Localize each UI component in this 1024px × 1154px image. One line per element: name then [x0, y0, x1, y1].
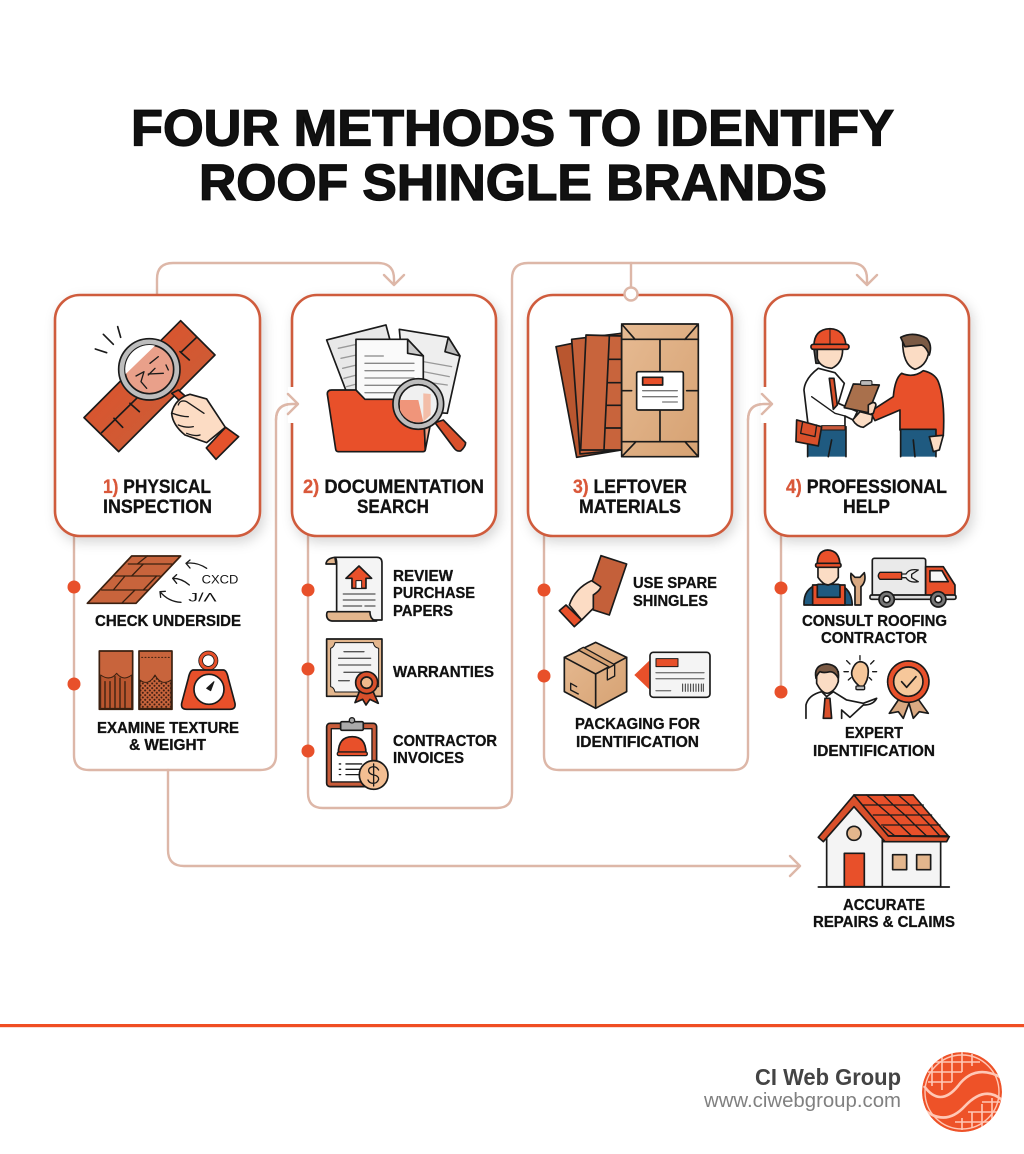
label: consult roofing contractor: CONSULT ROOFING — [802, 613, 947, 630]
title: ROOF SHINGLE BRANDS — [199, 154, 827, 211]
bullet dots 3 — [538, 584, 550, 682]
arrow: sublist 2 to card 4 — [308, 263, 877, 808]
title — [131, 100, 894, 211]
label: contractor invoices: CONTRACTOR — [393, 733, 497, 750]
icon: shingles and package — [556, 324, 698, 457]
label: consult roofing contractor: CONTRACTOR — [821, 630, 927, 647]
label: examine texture and weight — [97, 720, 239, 754]
arrow: card 1 to card 2 — [157, 263, 404, 295]
logo: circular brand mark — [922, 1052, 1002, 1132]
heading 1 — [103, 477, 212, 518]
gap in card 2 border — [288, 387, 296, 423]
sublist: physical inspection steps — [68, 556, 241, 754]
card frame 2 — [292, 295, 496, 536]
icon: contractor invoice clipboard — [327, 718, 388, 789]
label: use spare shingles: SHINGLES — [633, 593, 708, 610]
label: contractor invoices — [393, 733, 497, 767]
icon: roofing contractor and truck — [804, 550, 956, 607]
heading 2 — [303, 477, 484, 518]
icon: shingle underside: CXCD — [202, 573, 238, 587]
footer rule — [0, 1024, 1024, 1027]
icon: magnifier over shingle — [84, 321, 239, 459]
label: accurate repairs and claims: REPAIRS & CLAIMS — [813, 914, 955, 931]
branch node — [624, 288, 638, 300]
label: contractor invoices: INVOICES — [393, 750, 464, 767]
label: use spare shingles — [633, 575, 717, 610]
label: examine texture and weight: & WEIGHT — [129, 737, 206, 754]
label: use spare shingles: USE SPARE — [633, 575, 717, 592]
panel: physical inspection — [55, 295, 260, 536]
outcome: accurate repairs and claims — [813, 795, 955, 931]
sublist: leftover materials steps — [538, 556, 717, 751]
panel: leftover materials — [528, 288, 732, 536]
icon: house with red roof — [818, 795, 949, 887]
label: expert identification: IDENTIFICATION — [813, 743, 935, 760]
icon: warranty certificate — [327, 639, 382, 705]
icon: purchase paper scroll — [326, 557, 382, 621]
bullet dots 1 — [68, 580, 80, 690]
sublist: documentation steps — [302, 557, 497, 789]
label: accurate repairs and claims — [813, 897, 955, 931]
icon: package and shipping label — [564, 642, 710, 708]
icon: texture samples and weight — [99, 651, 235, 709]
label: expert identification — [813, 725, 935, 760]
heading 2: SEARCH — [357, 497, 429, 518]
label: packaging for identification: IDENTIFICATION — [576, 734, 699, 751]
label: review purchase papers: PURCHASE — [393, 585, 475, 602]
footer brand text: www.ciwebgroup.com — [703, 1090, 901, 1112]
card frame 3 — [528, 295, 732, 536]
card frame 1 — [55, 295, 260, 536]
heading 2: 2) DOCUMENTATION — [303, 477, 484, 498]
label: packaging for identification: PACKAGING FOR — [575, 716, 700, 733]
bullet dots 2 — [302, 584, 314, 758]
arrow: to accurate repairs — [168, 770, 800, 876]
gap in card 4 border — [761, 387, 769, 423]
label: review purchase papers — [393, 568, 475, 620]
connector arrows — [74, 263, 877, 876]
icon: expert with bulb and badge — [806, 656, 929, 718]
icon: folder and documents — [327, 325, 466, 452]
arrow: sublist 3 into card 4 — [544, 394, 772, 770]
heading 4: HELP — [843, 497, 890, 518]
arrow: sublist 1 into card 2 — [74, 394, 298, 770]
line: sublist 4 — [780, 536, 782, 692]
heading 3: MATERIALS — [579, 497, 681, 518]
heading 4: 4) PROFESSIONAL — [786, 477, 947, 498]
branch to card 3 — [630, 263, 632, 287]
card frame 4 — [765, 295, 969, 536]
icon: shingle underside: J/Λ — [188, 590, 218, 604]
arrow head over card 2 — [276, 394, 298, 420]
heading 3 — [573, 477, 687, 518]
heading 1: 1) PHYSICAL — [103, 477, 211, 498]
label: expert identification: EXPERT — [845, 725, 903, 742]
sublist: professional help steps — [774, 550, 956, 760]
arrow head over card 4 — [748, 394, 772, 420]
label: consult roofing contractor — [802, 613, 947, 647]
panel: professional help — [748, 295, 969, 536]
label: packaging for identification — [575, 716, 700, 751]
heading 4 — [786, 477, 947, 518]
title: FOUR METHODS TO IDENTIFY — [131, 100, 894, 156]
footer brand text — [703, 1064, 901, 1112]
footer brand text: CI Web Group — [755, 1064, 901, 1090]
heading 1: INSPECTION — [103, 497, 212, 518]
heading 3: 3) LEFTOVER — [573, 477, 687, 498]
label: review purchase papers: PAPERS — [393, 603, 453, 620]
bullet dots 4 — [774, 582, 788, 698]
label: accurate repairs and claims: ACCURATE — [843, 897, 925, 914]
icon: hand holding spare shingle — [559, 556, 627, 627]
icon: shingle underside — [87, 556, 238, 604]
label: warranties: WARRANTIES — [393, 664, 494, 681]
panel: documentation search — [276, 295, 496, 536]
icon: contractor shaking hands with homeowner — [796, 329, 944, 457]
label: check underside: CHECK UNDERSIDE — [95, 613, 241, 630]
label: examine texture and weight: EXAMINE TEXTURE — [97, 720, 239, 737]
label: review purchase papers: REVIEW — [393, 568, 454, 585]
